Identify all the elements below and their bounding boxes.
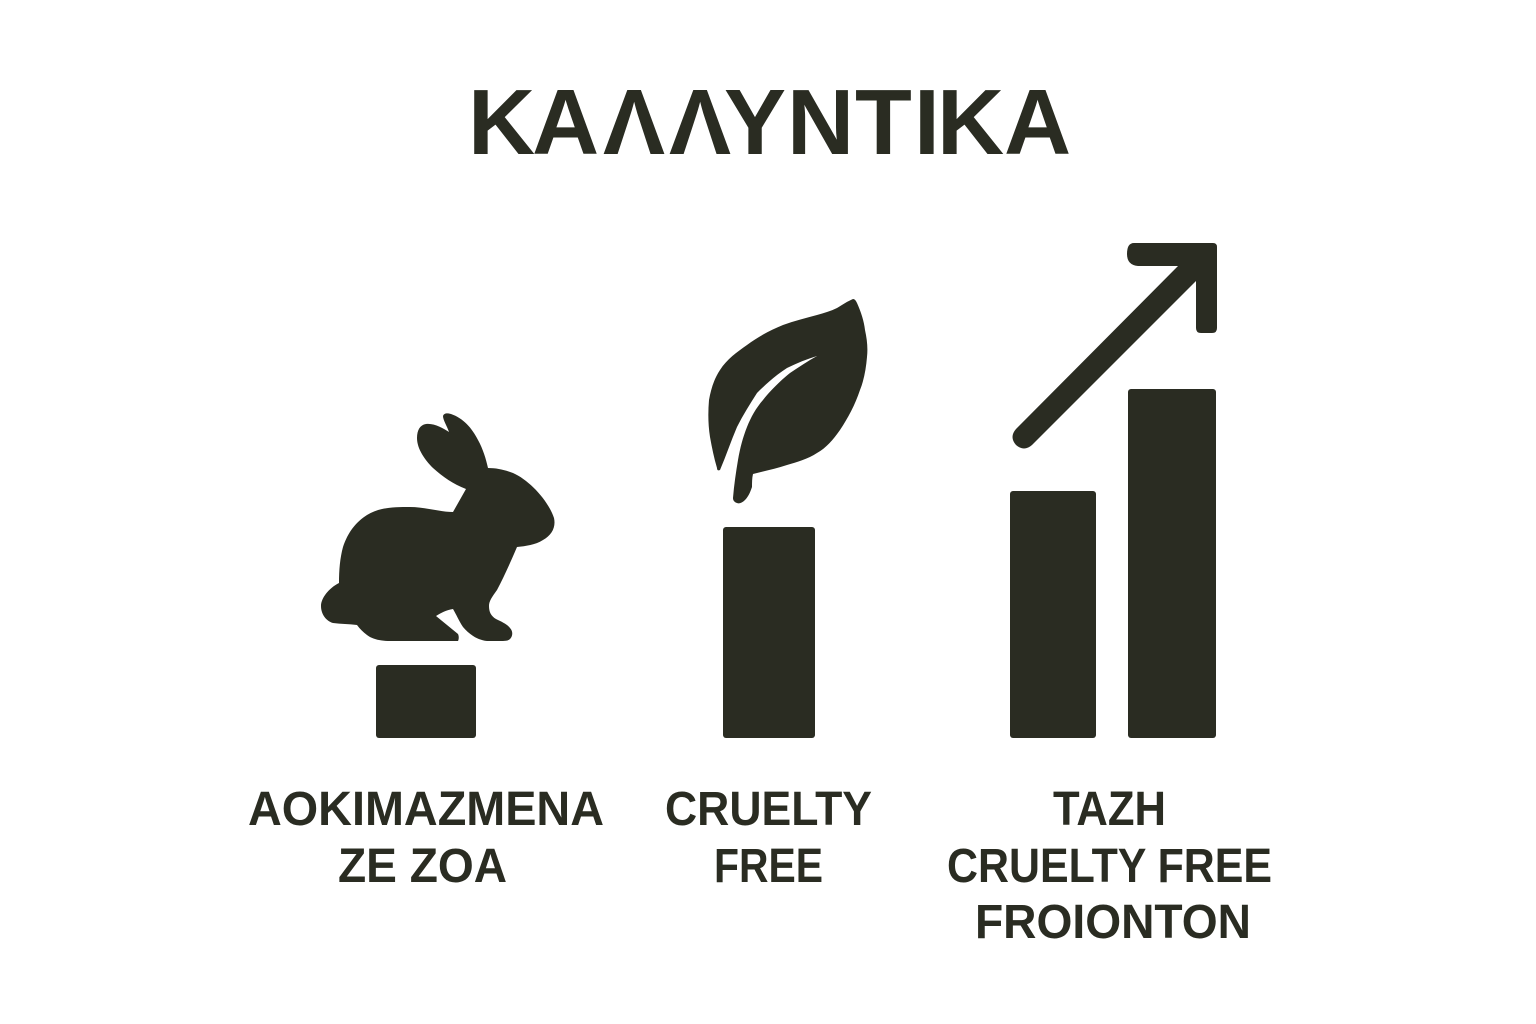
column: cruelty free product growth (947, 243, 1272, 949)
bar: tested on animals (376, 665, 476, 738)
label: tested on animals: ZE ZOA (338, 840, 507, 893)
label: tested on animals: AOKIMAZMENA (248, 783, 604, 836)
icon: rising arrow (1012, 243, 1217, 448)
title: ΚΑΛΛΥΝΤΙΚΑ (468, 70, 1071, 174)
column: cruelty free (665, 299, 872, 893)
label: cruelty free products: CRUELTY FREE (947, 840, 1272, 893)
label: cruelty free products (947, 783, 1272, 949)
bar: taller growth bar (1128, 389, 1216, 738)
bar: shorter growth bar (1010, 491, 1096, 738)
label: cruelty free products: TAZH (1053, 783, 1166, 836)
bar: cruelty free (723, 527, 815, 738)
label: cruelty free: CRUELTY (665, 783, 872, 836)
icon: leaf (708, 299, 867, 503)
label: cruelty free (665, 783, 872, 893)
label: tested on animals (248, 783, 604, 893)
column: tested on animals (248, 413, 604, 893)
label: cruelty free: FREE (714, 840, 823, 893)
label: cruelty free products: FROIONTON (975, 896, 1251, 949)
icon: rabbit (321, 413, 555, 641)
